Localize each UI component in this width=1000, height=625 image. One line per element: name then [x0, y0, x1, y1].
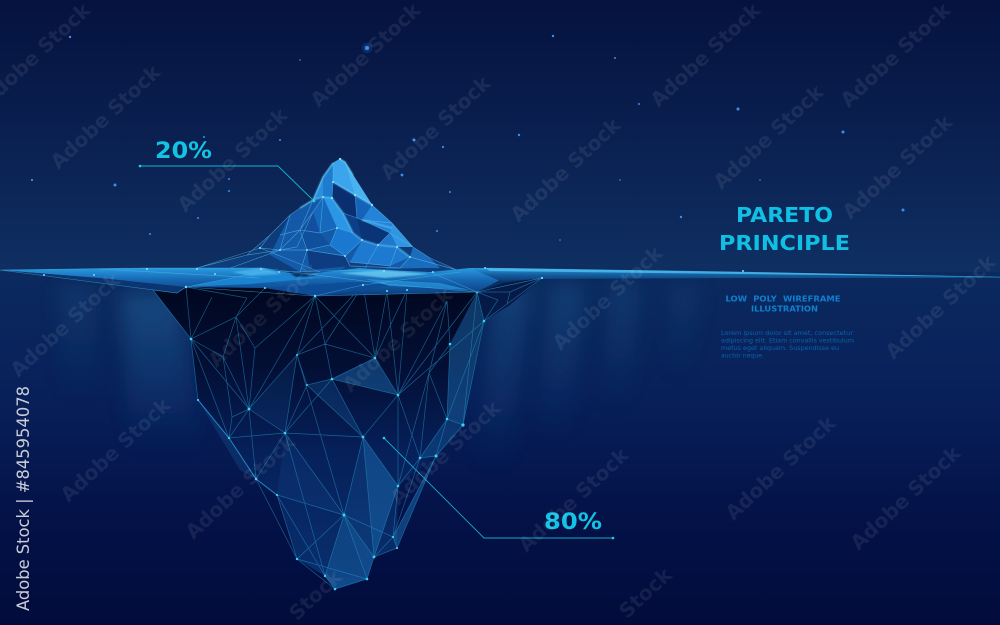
right band [470, 268, 1000, 281]
callout: 80% label: 80% [544, 510, 602, 535]
callout: 20% label [139, 139, 315, 202]
water surface ice sheet [0, 268, 1000, 296]
underwater wireframe [153, 278, 542, 589]
watermark pattern: Adobe Stock [837, 109, 958, 224]
thick outer edge [198, 400, 277, 495]
background: night sky [0, 0, 1000, 272]
watermark pattern: Adobe Stock [505, 112, 626, 227]
watermark pattern: Adobe Stock [720, 410, 841, 525]
watermark pattern: Adobe Stock [305, 0, 426, 112]
left wedge [0, 269, 186, 293]
watermark pattern: Adobe Stock [337, 282, 458, 397]
callout: 80% label [383, 437, 614, 539]
watermark pattern: Adobe Stock [5, 267, 126, 382]
title: PARETO [736, 203, 833, 227]
title [719, 203, 850, 255]
surface nodes [43, 267, 744, 297]
underwater light rays [60, 285, 700, 470]
watermark pattern: Adobe Stock [375, 70, 496, 185]
watermark pattern: Adobe Stock [513, 442, 634, 557]
watermark pattern: Stock [614, 562, 677, 623]
background: ocean [0, 272, 1000, 625]
watermark pattern: Adobe Stock [547, 240, 668, 355]
right wing dark wedge [477, 278, 542, 321]
watermark pattern: Stock [284, 564, 347, 625]
iceberg: underwater part [153, 278, 542, 590]
watermark pattern: Adobe Stock [708, 79, 829, 194]
watermark pattern: Adobe Stock [55, 392, 176, 507]
body text: adipiscing elit. Etiam convallis vestibulum [721, 338, 854, 344]
left shoulder translucent mesh [197, 159, 457, 276]
iceberg: mountain tip above water [197, 158, 457, 276]
star glow [362, 44, 372, 52]
watermark pattern: Adobe Stock [172, 102, 293, 217]
watermark pattern: Adobe Stock [385, 395, 506, 510]
title: PRINCIPLE [719, 231, 850, 255]
underwater lit facets [198, 292, 484, 589]
body text [721, 331, 854, 360]
watermark pattern: Adobe Stock [45, 59, 166, 174]
callout: 20% label: 20% [155, 139, 212, 164]
underwater nodes [190, 291, 485, 590]
subtitle: LOW POLY WIREFRAME [726, 294, 840, 304]
watermark pattern: Adobe Stock [880, 249, 1000, 364]
subtitle: ILLUSTRATION [751, 304, 818, 314]
watermark pattern: Adobe Stock [645, 0, 766, 112]
watermark pattern: Adobe Stock [180, 429, 301, 544]
watermark pattern: Adobe Stock [835, 0, 956, 112]
stars [31, 35, 904, 241]
watermark pattern: Adobe Stock [845, 440, 966, 555]
mountain lit facets [300, 159, 440, 272]
stock id side text: Adobe Stock | #845954078 [14, 386, 33, 611]
bright highlights [186, 272, 340, 287]
mountain nodes [259, 158, 411, 258]
body text: auctor neque. [721, 354, 764, 360]
watermark pattern: Adobe Stock [203, 257, 324, 372]
mountain wireframe [197, 159, 457, 272]
body text: metus eget aliquam. Suspendisse eu [721, 346, 839, 352]
body text: Lorem ipsum dolor sit amet, consectetur [721, 331, 854, 337]
subtitle [726, 294, 840, 314]
mountain bright ridges [300, 159, 410, 257]
